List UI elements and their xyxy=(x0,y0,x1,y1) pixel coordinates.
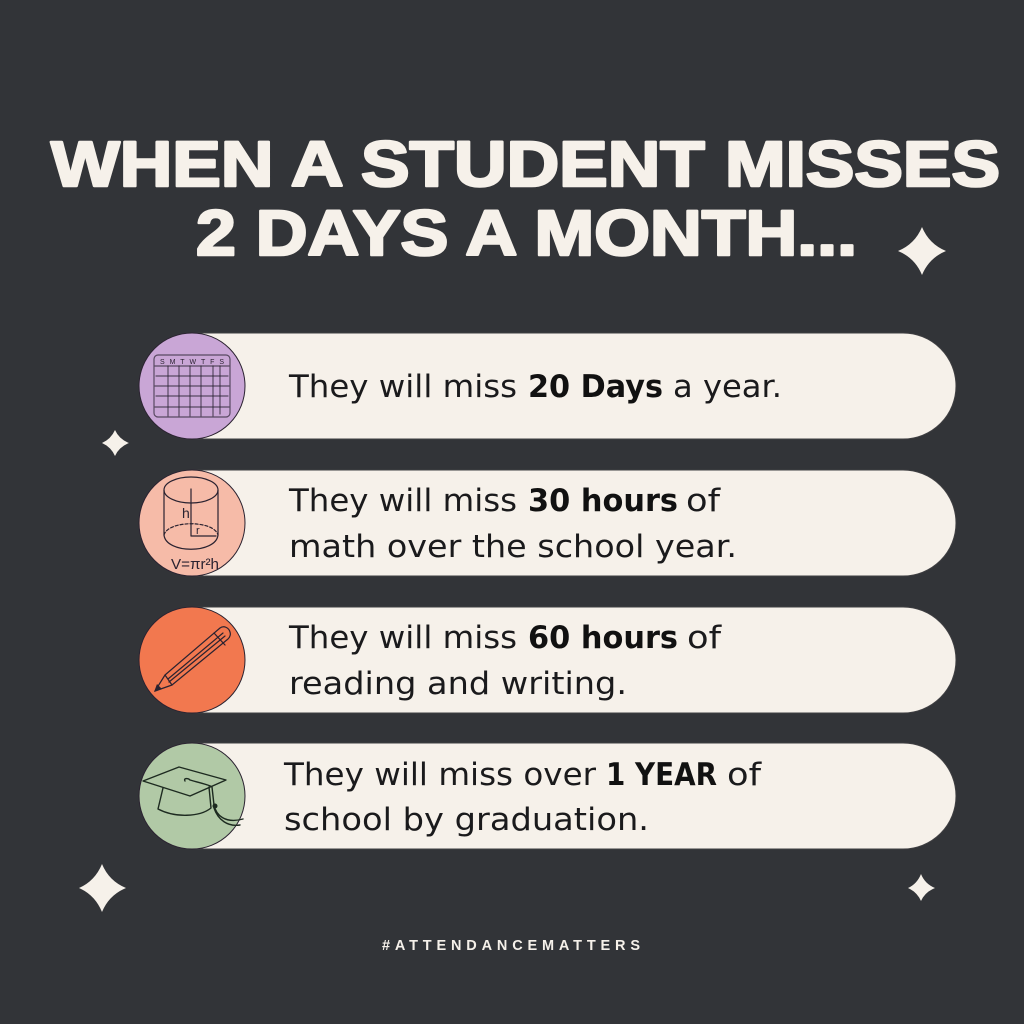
icon: large sparkle top right xyxy=(898,227,946,275)
text: 30 hours: of xyxy=(686,483,721,519)
title: 2 DAYS A MONTH... xyxy=(196,197,857,269)
icon: cylinder: r xyxy=(196,525,200,537)
text: 60 hours: They will miss xyxy=(288,620,517,656)
text: 1 year: They will miss over xyxy=(283,757,596,793)
text: 20 days: They will miss xyxy=(288,369,517,405)
text: 20 days: 20 Days xyxy=(528,369,663,405)
title: WHEN A STUDENT MISSES xyxy=(51,128,1000,200)
icon: pencil xyxy=(139,607,245,713)
icon: calendar xyxy=(139,333,245,439)
text: 60 hours: 60 hours xyxy=(528,620,678,656)
panel: 1 year xyxy=(139,743,956,849)
icon: calendar: SMTWTFS xyxy=(160,359,224,366)
text: 60 hours: reading and writing. xyxy=(289,666,627,702)
text: 30 hours xyxy=(288,483,737,565)
panel: 20 days xyxy=(139,333,956,439)
icon: large sparkle bottom left xyxy=(79,864,126,912)
icon: small sparkle bottom right xyxy=(908,874,935,901)
hashtag: #ATTENDANCEMATTERS xyxy=(382,938,640,954)
icon: cylinder xyxy=(139,470,245,576)
panel: 30 hours xyxy=(139,470,956,576)
text: 60 hours: of xyxy=(687,620,722,656)
text: 30 hours: 30 hours xyxy=(528,483,678,519)
icon: graduation cap xyxy=(139,743,245,849)
text: 1 year: of xyxy=(727,757,762,793)
text: 20 days: a year. xyxy=(673,369,782,405)
text: 30 hours: math over the school year. xyxy=(289,529,737,565)
panel: 60 hours xyxy=(139,607,956,713)
text: 1 year: school by graduation. xyxy=(284,802,649,838)
text: 30 hours: They will miss xyxy=(288,483,517,519)
icon: cylinder: h xyxy=(182,505,190,521)
icon: cylinder: V=πr²h xyxy=(171,556,219,573)
text: 20 days xyxy=(288,369,782,405)
icon: small sparkle left xyxy=(102,430,129,456)
text: 1 year xyxy=(283,757,762,838)
text: 60 hours xyxy=(288,620,722,702)
title xyxy=(51,128,1000,269)
text: 1 year: 1 YEAR xyxy=(606,757,717,793)
